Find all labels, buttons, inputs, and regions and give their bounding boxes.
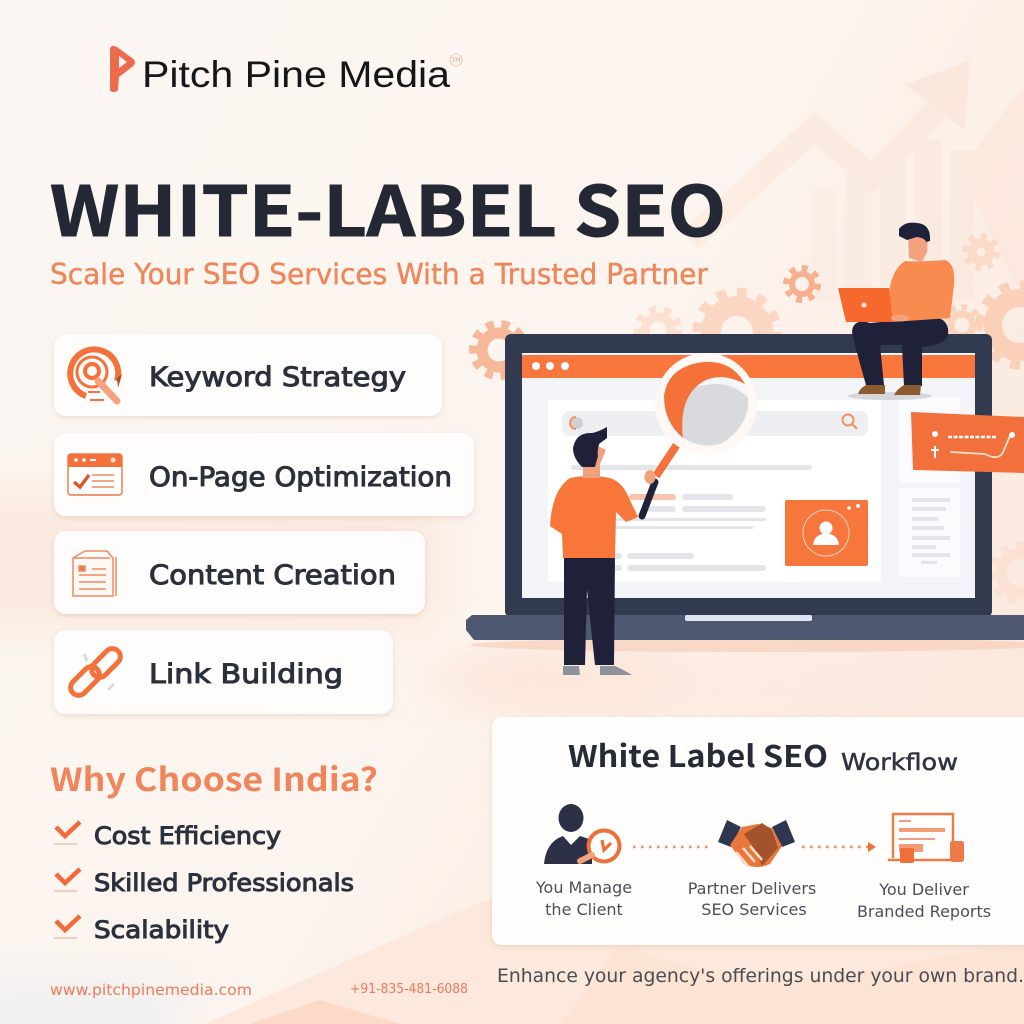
laptop base [466,615,1024,640]
face [908,235,928,262]
gear: small centre [786,268,818,300]
ground shadow [470,638,1024,652]
profile tile [785,500,868,566]
heading: Why Choose India: Why Choose India? [50,755,378,801]
gear: medium behind laptop [637,309,679,351]
service card: Link Building [54,630,393,714]
workflow title: White Label SEO [568,732,828,776]
subtitle: Scale Your SEO Services With a Trusted Partner [50,258,708,291]
logo [110,46,462,95]
browser bar [522,355,975,378]
icon: branded reports [888,814,964,863]
gear: left of laptop [473,324,525,376]
legs [852,317,948,386]
logo mark [110,46,135,92]
gear: top right [965,236,997,268]
title: WHITE-LABEL SEO [50,156,726,256]
service card: On-Page Optimization [54,433,474,516]
icon: chain link [67,645,124,699]
logo wordmark: Pitch Pine Media [142,54,450,95]
gear: right small [944,307,980,343]
torso [889,260,954,322]
hands [891,314,909,322]
step label two: Partner Delivers [688,879,816,898]
icon: browser checklist [68,454,122,495]
label: Link Building [149,659,343,690]
tagline: Enhance your agency's offerings under your own brand. [497,965,1024,987]
label: Keyword Strategy [149,362,406,393]
arrow: dotted connector two [802,842,876,852]
side panels [899,397,960,577]
browser content panel [548,400,881,582]
label: Content Creation [149,560,396,591]
laptop illustration [466,223,1024,675]
torso [550,476,638,558]
workflow subtitle: Workflow [841,750,958,776]
step label one: the Client [545,900,623,919]
gears [473,236,1024,601]
item: Skilled Professionals: Skilled Professionals [94,869,354,897]
icon: target [70,349,122,401]
icon: client manager [544,804,620,864]
trademark [450,54,462,66]
step label three: Branded Reports [857,902,991,921]
laptop hinge notch [685,615,812,621]
gear: lower right [992,545,1024,601]
shoes [858,385,921,395]
magnifying glass [642,357,753,516]
label: On-Page Optimization [149,462,452,493]
hair [899,223,930,242]
person: seated man [838,223,954,400]
screen [522,353,975,598]
hair [573,427,607,467]
decorative growth arrow and bars [690,60,1024,300]
item: Scalability: Scalability [94,916,229,944]
service card: Content Creation [54,531,425,614]
icon: documents [73,551,116,596]
search bar [562,411,868,436]
phone: +91-835-481-6088 [350,981,468,997]
orange chart banner [911,412,1024,473]
icon: handshake [718,820,795,867]
laptop lid [505,334,992,617]
step label two: SEO Services [701,900,807,919]
result lines [571,465,812,571]
step label three: You Deliver [878,880,969,899]
gear: right large [980,285,1024,365]
laptop logo [861,302,867,308]
hand [644,470,656,484]
checklist [54,822,354,944]
gear: large behind laptop [697,292,777,372]
arrow: dotted connector one [633,846,713,848]
workflow panel [492,717,1024,945]
person: standing man [550,427,656,675]
laptop [838,288,893,322]
website: www.pitchpinemedia.com [50,981,252,999]
shoes [563,666,632,675]
service card: Keyword Strategy [54,334,442,416]
step label one: You Manage [535,878,632,897]
item: Cost Efficiency: Cost Efficiency [94,822,281,850]
legs [564,556,615,665]
trademark: TM [451,57,460,64]
neck and ear [583,446,606,478]
shadow [848,392,932,400]
